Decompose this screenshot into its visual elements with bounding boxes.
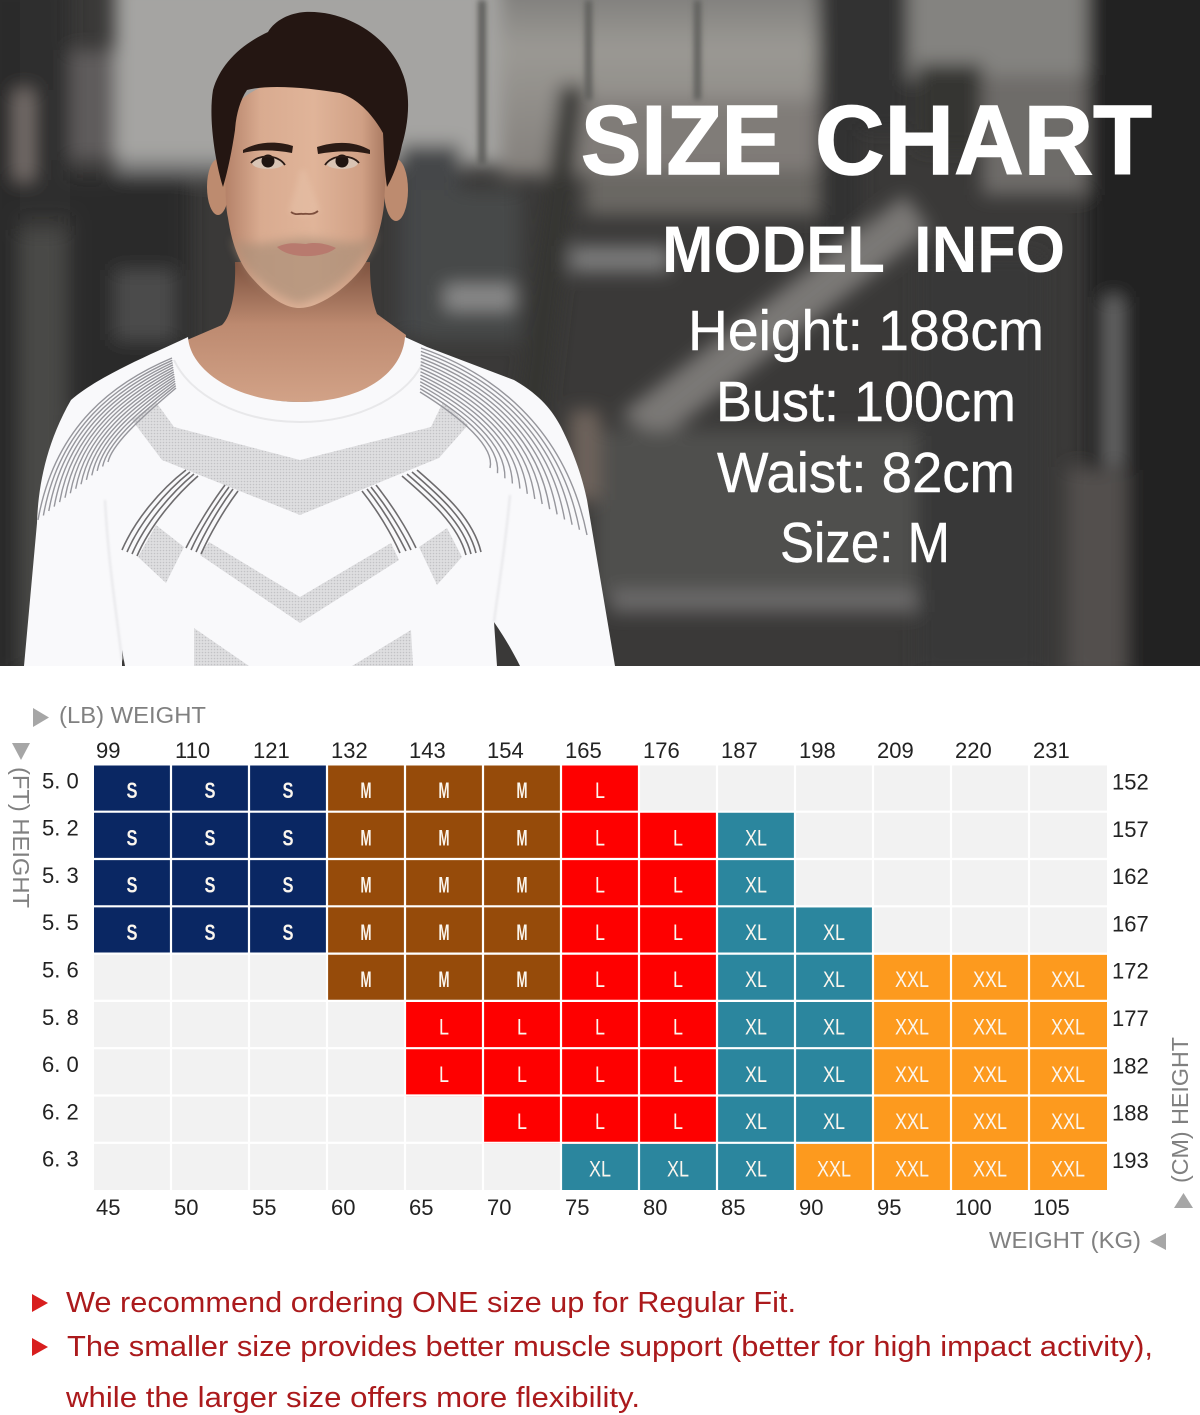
bottom axis: kilograms: 100 bbox=[955, 1195, 992, 1220]
cell labels: XXL: XXL bbox=[1051, 1156, 1085, 1181]
model shirt bbox=[24, 337, 615, 666]
left axis: feet: 5. 3 bbox=[42, 863, 79, 888]
cell labels: XXL: XXL bbox=[973, 967, 1007, 992]
cell labels: XL: XL bbox=[745, 873, 767, 898]
right axis: centimetres: 152 bbox=[1112, 770, 1149, 794]
bottom axis: kilograms: 105 bbox=[1033, 1195, 1070, 1220]
cell labels: XL bbox=[589, 825, 845, 1181]
cell labels: L: L bbox=[673, 825, 683, 850]
top axis: pounds: 99 bbox=[96, 738, 120, 763]
left axis: feet: 5. 5 bbox=[42, 910, 79, 935]
top axis: pounds: 110 bbox=[175, 738, 210, 763]
hair bbox=[211, 12, 408, 187]
cell labels: L: L bbox=[673, 1014, 683, 1040]
right axis: centimetres: 167 bbox=[1112, 911, 1149, 936]
window frame bars bbox=[478, 0, 701, 165]
cell labels: XL: XL bbox=[745, 1156, 767, 1181]
cell labels: M: M bbox=[438, 873, 450, 898]
cell labels: XXL: XXL bbox=[1051, 1062, 1085, 1087]
top axis: pounds: 209 bbox=[877, 738, 914, 763]
axis title: kilogram weight: WEIGHT (KG) bbox=[989, 1227, 1141, 1253]
cell labels: XL: XL bbox=[823, 1109, 845, 1134]
top axis: pounds: 220 bbox=[955, 738, 992, 763]
bottom axis: kilograms: 65 bbox=[409, 1195, 433, 1220]
cell labels: XL: XL bbox=[823, 1014, 845, 1040]
region: size XXL bbox=[796, 955, 1107, 1190]
model waist: Waist: 82cm bbox=[717, 441, 1015, 505]
face bbox=[226, 78, 386, 308]
cell labels: L: L bbox=[439, 1062, 449, 1087]
cell labels: M: M bbox=[516, 920, 528, 945]
cell labels: XXL: XXL bbox=[1051, 967, 1085, 992]
left axis: feet: 6. 2 bbox=[42, 1099, 79, 1124]
cell labels: L: L bbox=[595, 825, 605, 850]
cell labels: M: M bbox=[360, 967, 372, 992]
eyes bbox=[251, 154, 359, 169]
shirt body bbox=[24, 337, 615, 666]
right shoulder stripes bbox=[420, 348, 587, 535]
right axis: centimetres: 182 bbox=[1112, 1053, 1149, 1078]
cell labels: M: M bbox=[516, 873, 528, 898]
cell labels: XL: XL bbox=[823, 920, 845, 945]
cell labels: XL: XL bbox=[823, 1062, 845, 1087]
top axis: pounds: 132 bbox=[331, 738, 368, 763]
cell labels: L: L bbox=[673, 873, 683, 898]
empty cells bbox=[94, 766, 1107, 1190]
eyebrows bbox=[243, 143, 370, 154]
top axis: pounds: 165 bbox=[565, 738, 602, 763]
cell labels: S: S bbox=[126, 825, 138, 850]
cell labels: L: L bbox=[595, 1062, 605, 1087]
bottom axis: kilograms: 85 bbox=[721, 1195, 745, 1220]
cell labels: S: S bbox=[282, 920, 294, 945]
right axis: centimetres: 172 bbox=[1112, 959, 1149, 984]
right axis: centimetres: 157 bbox=[1112, 817, 1149, 842]
left axis: feet: 5. 2 bbox=[42, 816, 79, 841]
cell labels: XL: XL bbox=[745, 920, 767, 945]
left axis: feet: 5. 6 bbox=[42, 958, 79, 982]
bottom axis: kilograms: 45 bbox=[96, 1195, 120, 1220]
bottom axis: kilograms: 80 bbox=[643, 1195, 667, 1220]
bottom axis: kilograms: 60 bbox=[331, 1195, 355, 1220]
bottom axis: kilograms: 50 bbox=[174, 1195, 198, 1220]
cell labels: S: S bbox=[204, 873, 216, 898]
cell labels: S: S bbox=[204, 825, 216, 850]
nose bbox=[290, 178, 318, 215]
top axis: pounds: 231 bbox=[1033, 738, 1070, 763]
cell labels: XL: XL bbox=[823, 967, 845, 992]
cell labels: M: M bbox=[438, 967, 450, 992]
note: size support versus flexibility bbox=[32, 1331, 1153, 1414]
top axis: pounds: 143 bbox=[409, 738, 446, 763]
bottom axis: kilograms: 95 bbox=[877, 1195, 901, 1220]
mouth bbox=[277, 243, 336, 256]
cell labels: XXL: XXL bbox=[895, 1156, 929, 1181]
ears bbox=[207, 159, 408, 221]
cell labels: S: S bbox=[282, 825, 294, 850]
top axis: pounds: 176 bbox=[643, 738, 680, 763]
cell labels: L: L bbox=[595, 873, 605, 898]
cell labels: M: M bbox=[360, 873, 372, 898]
cell labels: XXL: XXL bbox=[1051, 1109, 1085, 1134]
bottom axis: kilograms: 55 bbox=[252, 1195, 276, 1220]
heading: size chart: CHART bbox=[815, 85, 1152, 195]
region: size L bbox=[406, 766, 718, 1144]
cell labels: XXL: XXL bbox=[895, 1014, 929, 1040]
heading: model info: MODEL bbox=[662, 212, 885, 286]
left shoulder stripes bbox=[38, 358, 176, 520]
cell labels: XL: XL bbox=[745, 967, 767, 992]
cell labels: L: L bbox=[595, 1109, 605, 1134]
cell labels: S: S bbox=[126, 920, 138, 945]
grid lines bbox=[94, 765, 1107, 1190]
right axis: centimetres: 188 bbox=[1112, 1101, 1149, 1126]
cell labels: XXL: XXL bbox=[1051, 1014, 1085, 1040]
cell labels: M: M bbox=[516, 967, 528, 992]
model height: Height: 188cm bbox=[688, 299, 1044, 363]
left axis: feet: 6. 3 bbox=[42, 1147, 79, 1172]
cell labels: L: L bbox=[517, 1014, 527, 1040]
cell labels: L: L bbox=[439, 1014, 449, 1040]
note: regular fit recommendation: We recommend ordering ONE size up for Regular Fit. bbox=[66, 1287, 796, 1319]
cell labels: XXL: XXL bbox=[895, 1109, 929, 1134]
top axis: pounds: 154 bbox=[487, 738, 524, 763]
top axis: pounds: 121 bbox=[253, 738, 290, 763]
cell labels: L: L bbox=[595, 778, 605, 803]
top axis: pounds: 187 bbox=[721, 738, 758, 763]
bottom axis: kilograms: 90 bbox=[799, 1195, 823, 1220]
bottom axis: kilograms bbox=[96, 1195, 1070, 1220]
cell labels: XXL: XXL bbox=[973, 1109, 1007, 1134]
cell labels: L: L bbox=[673, 967, 683, 992]
cell labels: M bbox=[360, 778, 528, 992]
cell labels: M: M bbox=[516, 778, 528, 803]
cell labels: XXL: XXL bbox=[895, 967, 929, 992]
right axis: centimetres: 177 bbox=[1112, 1006, 1149, 1031]
beard shadow bbox=[232, 232, 378, 304]
model head bbox=[207, 12, 408, 308]
top axis: pounds: 198 bbox=[799, 738, 836, 763]
region: size S bbox=[94, 766, 328, 954]
chest strap lines bbox=[122, 470, 481, 556]
heading: size chart bbox=[582, 104, 1152, 176]
cell labels: XL: XL bbox=[745, 1062, 767, 1087]
left axis: feet bbox=[42, 768, 79, 1172]
cell labels: XL: XL bbox=[589, 1156, 611, 1181]
cell labels: XXL: XXL bbox=[817, 1156, 851, 1181]
cell labels: L: L bbox=[595, 967, 605, 992]
cell labels: XL: XL bbox=[745, 1109, 767, 1134]
cell labels: L: L bbox=[673, 1062, 683, 1087]
cell labels: S: S bbox=[204, 778, 216, 803]
left axis: feet: 6. 0 bbox=[42, 1052, 79, 1077]
axis title: feet height: (FT) HEIGHT bbox=[8, 767, 34, 908]
cell labels: S: S bbox=[282, 778, 294, 803]
side mesh patches bbox=[138, 525, 462, 666]
cell labels: XXL: XXL bbox=[973, 1062, 1007, 1087]
top axis: pounds bbox=[96, 738, 1070, 763]
note: size support versus flexibility: The smaller size provides better muscle support (better for high impact activity), bbox=[67, 1331, 1153, 1363]
cell labels: S: S bbox=[126, 778, 138, 803]
cell labels: XXL: XXL bbox=[895, 1062, 929, 1087]
cell labels: L: L bbox=[673, 1109, 683, 1134]
cell labels: L: L bbox=[673, 920, 683, 945]
heading: model info bbox=[666, 226, 1062, 272]
cell labels: S: S bbox=[204, 920, 216, 945]
model bust: Bust: 100cm bbox=[716, 370, 1016, 434]
lower mesh chevron bbox=[200, 542, 399, 623]
right axis: centimetres: 193 bbox=[1112, 1148, 1149, 1173]
cell labels: XXL: XXL bbox=[973, 1014, 1007, 1040]
cell labels: M: M bbox=[438, 778, 450, 803]
bottom axis: kilograms: 70 bbox=[487, 1195, 511, 1220]
photo panel: gym background with model bbox=[0, 0, 1200, 680]
cell labels: S bbox=[126, 778, 294, 945]
heading: model info: INFO bbox=[914, 212, 1065, 286]
cell labels: XL: XL bbox=[667, 1156, 689, 1181]
size chart grid bbox=[94, 765, 1107, 1190]
cell labels: S: S bbox=[126, 873, 138, 898]
axis title: centimetre height: (CM) HEIGHT bbox=[1167, 1037, 1193, 1183]
blurred gym background bbox=[0, 0, 1200, 680]
cell labels: M: M bbox=[516, 825, 528, 850]
cell labels: L: L bbox=[595, 920, 605, 945]
left axis: feet: 5. 0 bbox=[42, 768, 79, 793]
model size: Size: M bbox=[780, 511, 950, 575]
cell labels: S: S bbox=[282, 873, 294, 898]
left axis: feet: 5. 8 bbox=[42, 1005, 79, 1030]
cell labels: M: M bbox=[360, 825, 372, 850]
cell labels: L: L bbox=[517, 1062, 527, 1087]
right axis: centimetres bbox=[1112, 770, 1149, 1173]
cell labels: L: L bbox=[517, 1109, 527, 1134]
cell labels: M: M bbox=[438, 825, 450, 850]
region: size XL bbox=[562, 812, 873, 1190]
cell labels: M: M bbox=[360, 920, 372, 945]
axis title: pound weight: (LB) WEIGHT bbox=[59, 702, 206, 728]
chest mesh chevron bbox=[132, 402, 468, 515]
cell labels: XL: XL bbox=[745, 1014, 767, 1040]
cell labels: L bbox=[439, 778, 683, 1134]
cell labels: L: L bbox=[595, 1014, 605, 1040]
region: size M bbox=[328, 766, 562, 1002]
arm seams bbox=[105, 495, 510, 660]
model neck bbox=[187, 262, 406, 402]
shirt collar shading bbox=[174, 360, 424, 422]
note: size support versus flexibility: while the larger size offers more flexibility. bbox=[65, 1382, 640, 1414]
cell labels: M: M bbox=[438, 920, 450, 945]
bottom axis: kilograms: 75 bbox=[565, 1195, 589, 1220]
cell labels: M: M bbox=[360, 778, 372, 803]
right axis: centimetres: 162 bbox=[1112, 864, 1149, 889]
cell labels: XL: XL bbox=[745, 825, 767, 850]
cell labels: XXL: XXL bbox=[973, 1156, 1007, 1181]
heading: size chart: SIZE bbox=[581, 85, 782, 195]
cell labels: XXL bbox=[817, 967, 1085, 1181]
